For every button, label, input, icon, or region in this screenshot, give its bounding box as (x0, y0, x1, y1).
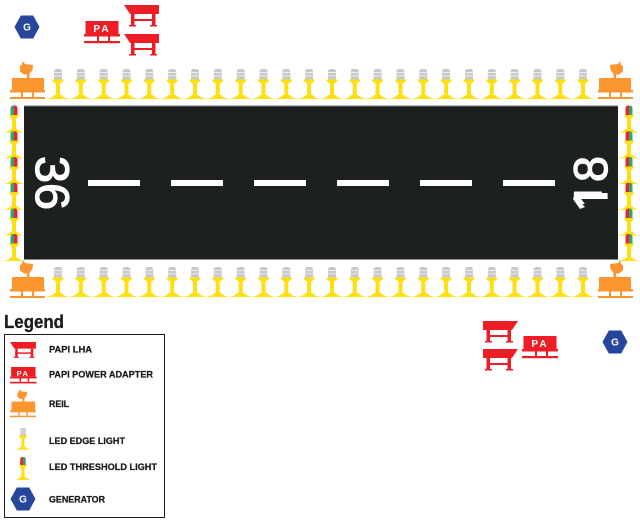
generator bottom right: G (611, 338, 619, 348)
legend label: generator: GENERATOR (49, 494, 105, 506)
runway number 36: 36 (26, 156, 79, 210)
legend icon: LED threshold light (15, 457, 31, 480)
legend icon: generator (10, 488, 36, 510)
legend icon: PAPI LHA (10, 342, 36, 358)
top edge lights (46, 69, 594, 99)
generator top left (14, 16, 40, 38)
PAPI power adapter bottom: PA (531, 339, 549, 350)
centerline dashes (88, 180, 555, 186)
PAPI LHA top 1 (124, 5, 159, 26)
REIL bottom left (10, 260, 45, 298)
legend label: LED threshold light: LED THRESHOLD LIGHT (49, 462, 157, 473)
legend panel (4, 334, 164, 518)
legend title: Legend (4, 312, 64, 332)
generator top left: G (23, 22, 31, 34)
legend icon: PAPI power adapter: PA (17, 369, 29, 378)
runway (24, 106, 618, 260)
REIL top right (598, 61, 633, 99)
PAPI LHA bottom 2 (483, 349, 518, 370)
left threshold lights (4, 106, 24, 261)
PAPI power adapter top (84, 21, 120, 43)
bottom edge lights (46, 267, 594, 297)
legend label: REIL: REIL (49, 399, 69, 410)
generator bottom right (602, 330, 628, 354)
legend icon: PAPI power adapter (10, 367, 37, 383)
legend icon: REIL (10, 389, 36, 417)
legend label: LED edge light: LED EDGE LIGHT (49, 436, 125, 447)
REIL top left (10, 61, 45, 99)
legend icon: LED edge light (15, 428, 31, 450)
legend icon: generator: G (19, 494, 27, 506)
PAPI LHA top 2 (124, 34, 159, 56)
PAPI power adapter top: PA (93, 24, 111, 35)
right threshold lights (618, 106, 640, 261)
REIL bottom right (598, 260, 633, 298)
legend label: PAPI power adapter: PAPI POWER ADAPTER (49, 370, 153, 380)
legend label: PAPI LHA: PAPI LHA (49, 344, 92, 356)
runway number 18: 18 (564, 156, 617, 208)
PAPI power adapter bottom (522, 336, 558, 358)
PAPI LHA bottom 1 (483, 321, 518, 342)
